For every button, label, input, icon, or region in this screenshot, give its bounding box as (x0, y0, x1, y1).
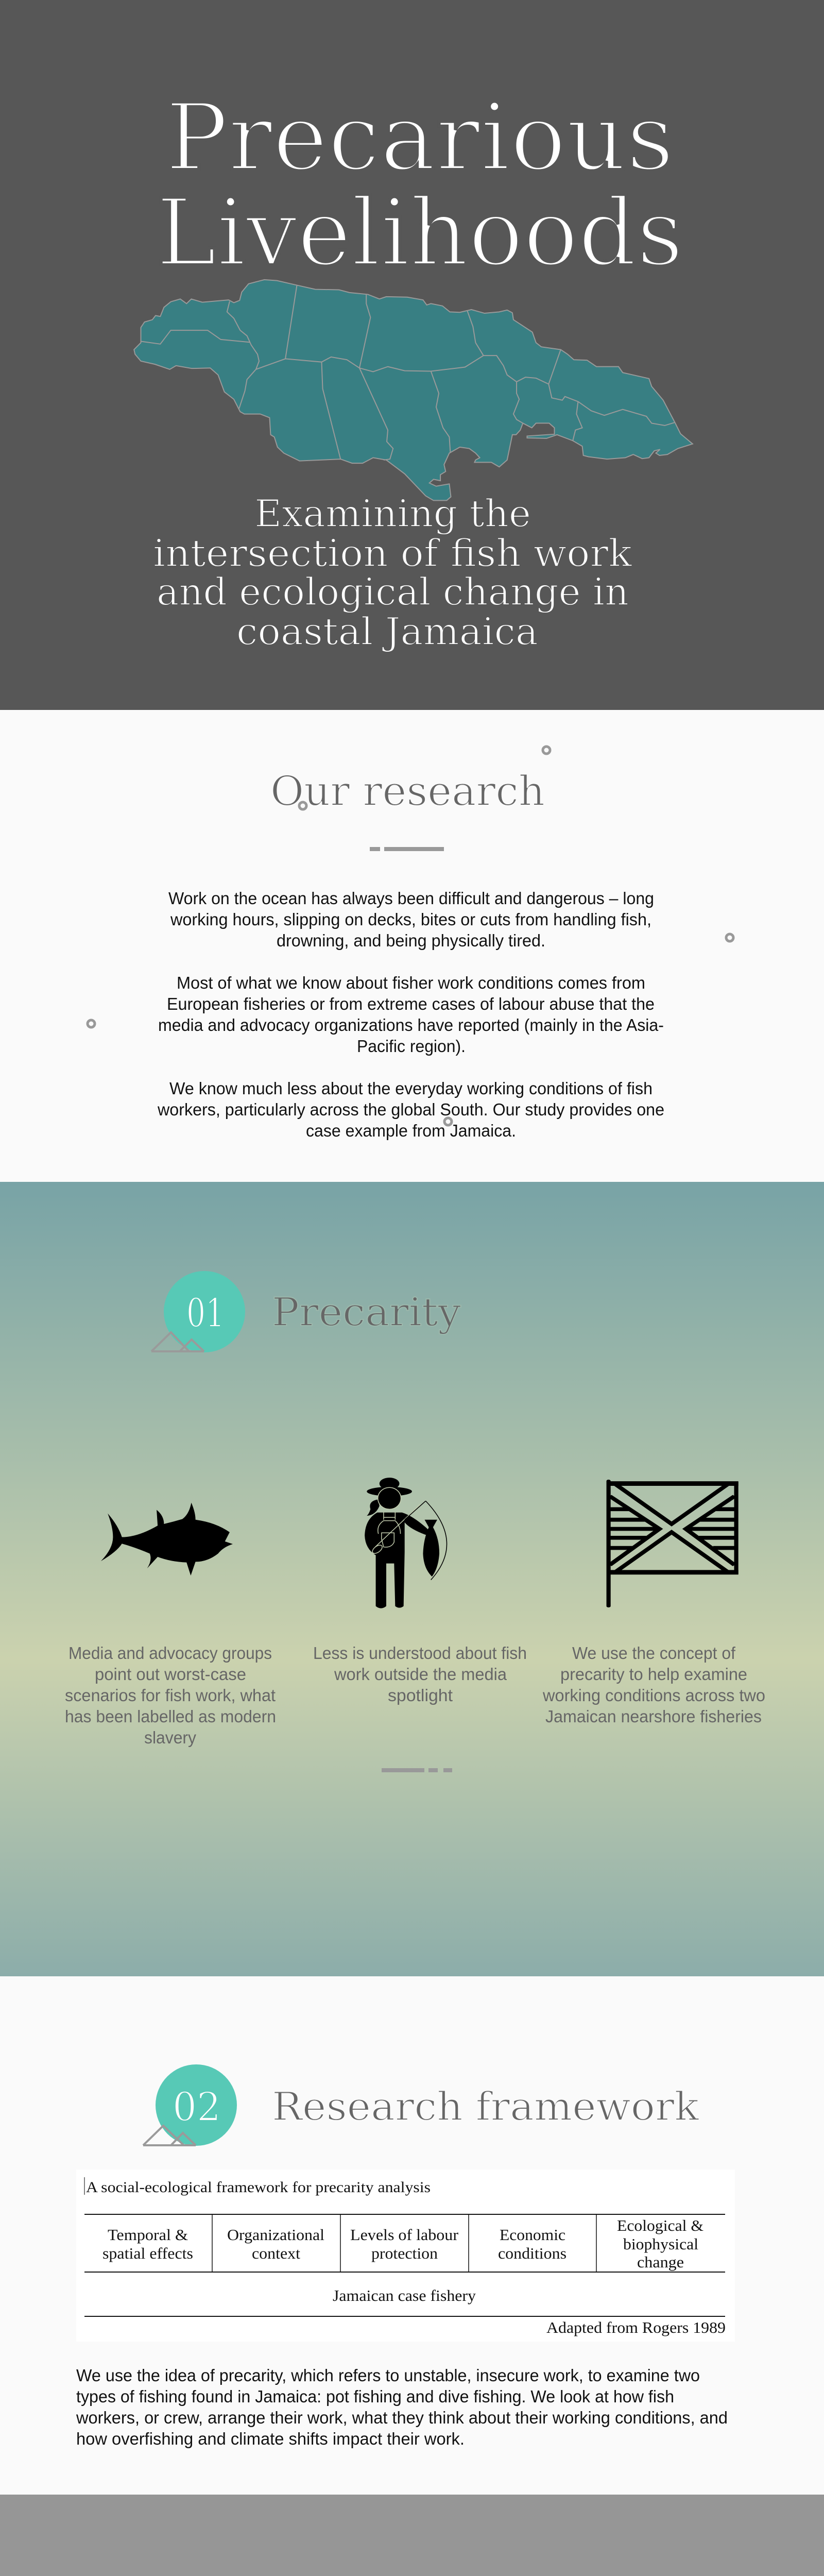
title: Precarious (165, 84, 674, 192)
text block: intro: workers, particularly across the global South. Our study provides one (157, 1100, 664, 1119)
caption: less is understood: Less is understood about fish (313, 1643, 527, 1663)
caption: media and advocacy: slavery (144, 1728, 196, 1747)
subtitle (153, 492, 632, 654)
framework table: Economic (500, 2226, 565, 2244)
caption: less is understood (313, 1643, 527, 1705)
number badge 01 (151, 1271, 245, 1352)
map of Jamaica (134, 280, 693, 500)
text block: intro: case example from Jamaica. (306, 1121, 516, 1140)
caption: concept of precarity: We use the concept of (572, 1643, 736, 1663)
number badge 01: 01 (186, 1291, 225, 1336)
text block: intro (157, 889, 664, 1140)
caption: less is understood: spotlight (388, 1686, 453, 1705)
subtitle: intersection of fish work (153, 532, 632, 575)
caption: concept of precarity: working conditions across two (542, 1686, 765, 1705)
caption: concept of precarity (542, 1643, 765, 1726)
text block: framework description (76, 2366, 728, 2448)
text block: framework description: types of fishing found in Jamaica: pot fishing and dive fishing. We look at how fish (76, 2387, 674, 2406)
subtitle: coastal Jamaica (236, 610, 538, 654)
caption: media and advocacy: has been labelled as modern (65, 1707, 276, 1726)
text block: intro: working hours, slipping on decks, bites or cuts from handling fish, (170, 910, 651, 929)
divider dash (382, 1768, 452, 1772)
text block: framework description: how overfishing and climate shifts impact their work. (76, 2429, 465, 2448)
framework table: protection (371, 2244, 438, 2262)
divider dash (370, 847, 444, 851)
framework table: Ecological & (617, 2216, 703, 2234)
framework table: Organizational (227, 2226, 324, 2244)
caption: less is understood: work outside the media (334, 1665, 507, 1684)
framework table: Levels of labour (350, 2226, 459, 2244)
framework table: change (637, 2253, 684, 2271)
subtitle: and ecological change in (157, 570, 629, 614)
panel: 01 precarity (0, 1182, 824, 1976)
number badge 02: 02 (173, 2084, 221, 2130)
text block: framework description: We use the idea of precarity, which refers to unstable, insecure work, to examine two (76, 2366, 700, 2385)
heading: precarity: Precarity (272, 1289, 461, 1335)
framework table (76, 2170, 735, 2342)
text block: intro: We know much less about the everyday working conditions of fish (169, 1079, 653, 1098)
decorative rings (88, 747, 733, 1125)
panel: 03 work in the pot and dive fishery (0, 2495, 824, 2576)
subtitle: Examining the (254, 492, 531, 536)
text block: intro: media and advocacy organizations have reported (mainly in the Asia- (158, 1015, 664, 1035)
caption: media and advocacy: Media and advocacy groups (68, 1643, 272, 1663)
caption: concept of precarity: Jamaican nearshore fisheries (545, 1707, 762, 1726)
caption: media and advocacy (65, 1643, 276, 1747)
framework table: context (252, 2244, 300, 2262)
caption: concept of precarity: precarity to help examine (560, 1665, 747, 1684)
panel: hero (0, 0, 824, 710)
framework table: spatial effects (102, 2244, 193, 2262)
icon: fisher woman (365, 1478, 447, 1608)
heading: research framework: Research framework (272, 2083, 699, 2129)
text block: intro: European fisheries or from extreme cases of labour abuse that the (167, 994, 655, 1013)
text block: intro: Work on the ocean has always been difficult and dangerous – long (168, 889, 654, 908)
panel: our research (0, 710, 824, 1182)
caption: media and advocacy: scenarios for fish work, what (65, 1686, 276, 1705)
text block: intro: Most of what we know about fisher work conditions comes from (177, 973, 645, 992)
icon: jamaican flag (609, 1481, 739, 1606)
title (156, 84, 683, 287)
framework table: A social-ecological framework for precarity analysis (86, 2179, 431, 2196)
panel: 02 research framework (0, 1976, 824, 2495)
text block: intro: drowning, and being physically tired. (277, 931, 545, 950)
framework table: Jamaican case fishery (333, 2286, 476, 2304)
text block: intro: Pacific region). (357, 1037, 466, 1056)
text block: framework description: workers, or crew, arrange their work, what they think about their working conditions, and (76, 2408, 728, 2427)
number badge 02 (143, 2064, 237, 2146)
framework table: conditions (498, 2244, 566, 2262)
caption: media and advocacy: point out worst-case (95, 1665, 246, 1684)
framework table: Temporal & (108, 2226, 188, 2244)
framework table: Adapted from Rogers 1989 (546, 2318, 726, 2336)
title: Livelihoods (156, 179, 683, 287)
heading: our research: Our research (270, 767, 545, 815)
icon: tuna (101, 1503, 233, 1575)
framework table: biophysical (623, 2235, 698, 2253)
